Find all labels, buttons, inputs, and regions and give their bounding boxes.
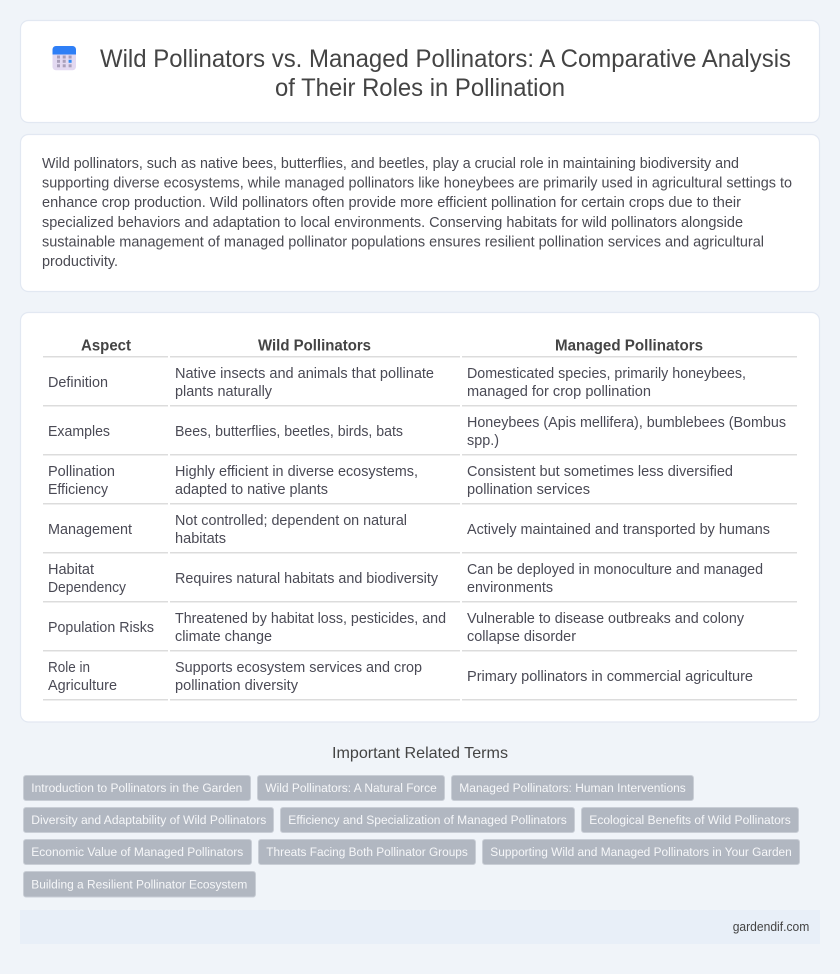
table row: examples: Honeybees (Apis mellifera), bumblebees (Bombus (467, 415, 786, 431)
chip: resilient ecosystem: Building a Resilient Pollinator Ecosystem (31, 878, 247, 892)
table row: role in agriculture (48, 660, 753, 694)
table row: examples: Bees, butterflies, beetles, birds, bats (175, 424, 403, 440)
chip: resilient ecosystem (24, 872, 256, 897)
chip: threats: Threats Facing Both Pollinator Groups (266, 845, 468, 859)
text block: introduction paragraph: enhance crop production. Wild pollinators often provide more efficient pollination for certain crops due to their (42, 195, 741, 211)
chip: introduction: Introduction to Pollinators in the Garden (31, 781, 242, 795)
table row: population risks: Vulnerable to disease outbreaks and colony (467, 611, 745, 627)
table row: role in agriculture: pollination diversity (175, 678, 299, 694)
table row: definition: Domesticated species, primarily honeybees, (467, 366, 746, 382)
table row: population risks (48, 611, 745, 645)
text block: introduction paragraph: specialized behaviors and adaptation to local environments. Conserving habitats for wild pollinators alongside (42, 215, 743, 231)
table row: pollination efficiency: Efficiency (48, 482, 109, 498)
chip: managed pollinators: Managed Pollinators: Human Interventions (459, 781, 686, 795)
table row: population risks: Population Risks (48, 620, 154, 636)
chip: wild pollinators: Wild Pollinators: A Natural Force (265, 781, 437, 795)
table row: habitat dependency (48, 562, 763, 596)
table row: management: habitats (175, 531, 226, 547)
table header row: Aspect (81, 338, 131, 354)
table header row (81, 338, 703, 354)
table row: role in agriculture: Agriculture (48, 678, 117, 694)
table row: habitat dependency: Dependency (48, 580, 127, 596)
title: of Their Roles in Pollination (275, 74, 565, 102)
table row: habitat dependency: Requires natural habitats and biodiversity (175, 571, 439, 587)
table row: management: Actively maintained and transported by humans (467, 522, 770, 538)
chip: introduction (24, 776, 250, 800)
table row: definition: Native insects and animals that pollinate (175, 366, 434, 382)
panel: introduction (20, 134, 820, 292)
table row: pollination efficiency: Highly efficient in diverse ecosystems, (175, 464, 418, 480)
chip: diversity (24, 808, 274, 832)
title (100, 45, 791, 102)
table header row: Managed Pollinators (555, 338, 703, 354)
table row: pollination efficiency: adapted to native plants (175, 482, 328, 498)
table row: definition (48, 366, 746, 400)
footer (20, 910, 820, 944)
table row: management: Not controlled; dependent on natural (175, 513, 407, 529)
chip: economic value (24, 840, 252, 864)
text block: introduction paragraph: Wild pollinators, such as native bees, butterflies, and beetles, play a crucial role in maintaining biodiversity and (42, 156, 739, 172)
chip: economic value: Economic Value of Managed Pollinators (31, 845, 243, 859)
chip: diversity: Diversity and Adaptability of Wild Pollinators (31, 813, 266, 827)
table row: habitat dependency: Habitat (48, 562, 94, 578)
panel: comparison table (20, 312, 820, 722)
title: Wild Pollinators vs. Managed Pollinators: A Comparative Analysis (100, 45, 791, 73)
chip: efficiency: Efficiency and Specialization of Managed Pollinators (288, 813, 567, 827)
table row: pollination efficiency (48, 464, 733, 498)
panel: header (20, 20, 820, 122)
chip: threats (258, 840, 476, 864)
table row: definition: plants naturally (175, 384, 273, 400)
chip: managed pollinators (452, 776, 694, 800)
icon: calendar (52, 46, 76, 70)
table row: pollination efficiency: pollination services (467, 482, 590, 498)
table row: role in agriculture: Role in (48, 660, 90, 676)
table row: management: Management (48, 522, 132, 538)
chip: ecological benefits (582, 808, 798, 832)
table row: role in agriculture: Primary pollinators in commercial agriculture (467, 669, 753, 685)
table row: population risks: collapse disorder (467, 629, 576, 645)
table row: examples (48, 415, 786, 449)
text block: introduction paragraph (42, 156, 792, 270)
related term chips (24, 776, 800, 897)
text block: introduction paragraph: sustainable management of managed pollinator populations ensures resilient pollination services and agricultural (42, 234, 764, 250)
table row: population risks: Threatened by habitat loss, pesticides, and (175, 611, 446, 627)
table row: habitat dependency: environments (467, 580, 553, 596)
table row: management (48, 513, 770, 547)
chip: wild pollinators (258, 776, 444, 800)
footer link text: gardendif.com (733, 919, 809, 934)
table row: role in agriculture: Supports ecosystem services and crop (175, 660, 422, 676)
table row: definition: Definition (48, 375, 108, 391)
text block: introduction paragraph: productivity. (42, 254, 118, 270)
chip: supporting: Supporting Wild and Managed Pollinators in Your Garden (490, 845, 792, 859)
table row: pollination efficiency: Pollination (48, 464, 115, 480)
chip: supporting (482, 840, 800, 864)
table row: examples: Examples (48, 424, 110, 440)
chip: efficiency (280, 808, 574, 832)
table header row: Wild Pollinators (258, 338, 371, 354)
table row: habitat dependency: Can be deployed in monoculture and managed (467, 562, 763, 578)
chip: ecological benefits: Ecological Benefits of Wild Pollinators (589, 813, 791, 827)
table row: examples: spp.) (467, 433, 499, 449)
heading: important related terms: Important Related Terms (332, 745, 508, 762)
table row: population risks: climate change (175, 629, 272, 645)
text block: introduction paragraph: supporting diverse ecosystems, while managed pollinators like honeybees are primarily used in agricultural settings to (42, 176, 792, 192)
table row: pollination efficiency: Consistent but sometimes less diversified (467, 464, 733, 480)
table row: definition: managed for crop pollination (467, 384, 651, 400)
